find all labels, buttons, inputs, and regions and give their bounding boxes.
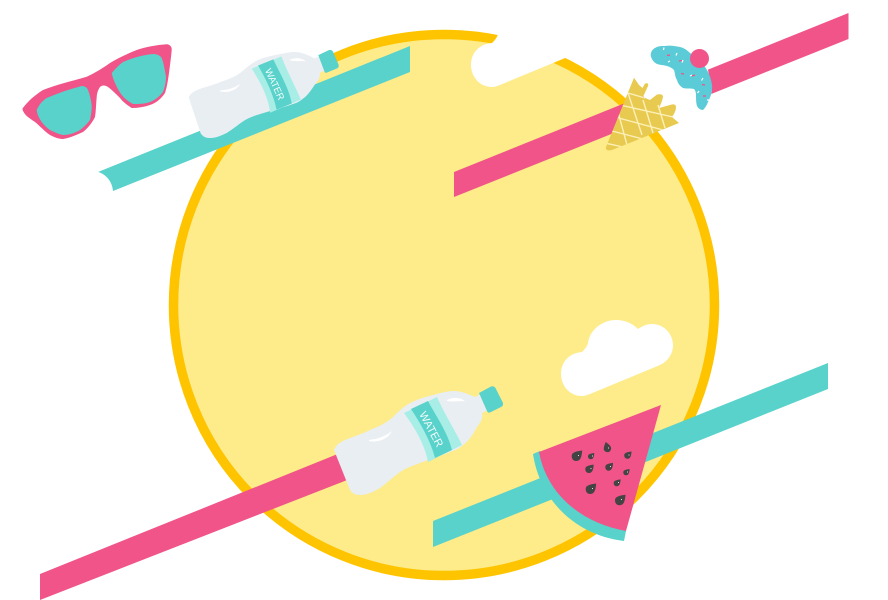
cloud: lower left xyxy=(1,167,113,243)
bottle cap xyxy=(479,386,503,413)
sunglasses xyxy=(23,44,172,139)
scoop xyxy=(634,44,712,123)
water bottle: bottom xyxy=(334,386,503,495)
waffle cone xyxy=(606,78,679,150)
bottle text: WATER xyxy=(262,67,286,102)
right lens xyxy=(112,54,166,104)
pink band: top right xyxy=(454,13,848,197)
watermelon xyxy=(533,405,661,541)
cloud: middle xyxy=(561,320,673,396)
bottle text: WATER xyxy=(416,410,445,449)
inner label xyxy=(411,401,452,458)
sprinkles xyxy=(664,48,708,101)
water bottle: top xyxy=(186,42,340,145)
flesh xyxy=(539,405,661,531)
seeds xyxy=(572,442,632,505)
cloud: top xyxy=(471,11,583,87)
icing xyxy=(651,46,712,110)
highlights xyxy=(220,54,306,97)
left lens xyxy=(37,86,92,135)
inner label xyxy=(256,59,294,110)
cherry xyxy=(690,49,709,68)
rind xyxy=(533,451,626,541)
highlights xyxy=(369,398,465,442)
outer label xyxy=(249,55,303,114)
bottle body xyxy=(334,391,488,495)
bottle body xyxy=(186,46,326,145)
outer label xyxy=(404,397,462,462)
ice cream xyxy=(606,46,712,150)
seed highlights xyxy=(578,448,630,500)
teal band: bottom right xyxy=(433,363,828,547)
frame xyxy=(23,44,172,139)
pink band: bottom left xyxy=(40,449,360,600)
teal band: top left xyxy=(98,46,410,191)
pink sprinkles xyxy=(667,55,706,96)
sun circle xyxy=(174,34,714,576)
bottle cap xyxy=(317,49,340,74)
